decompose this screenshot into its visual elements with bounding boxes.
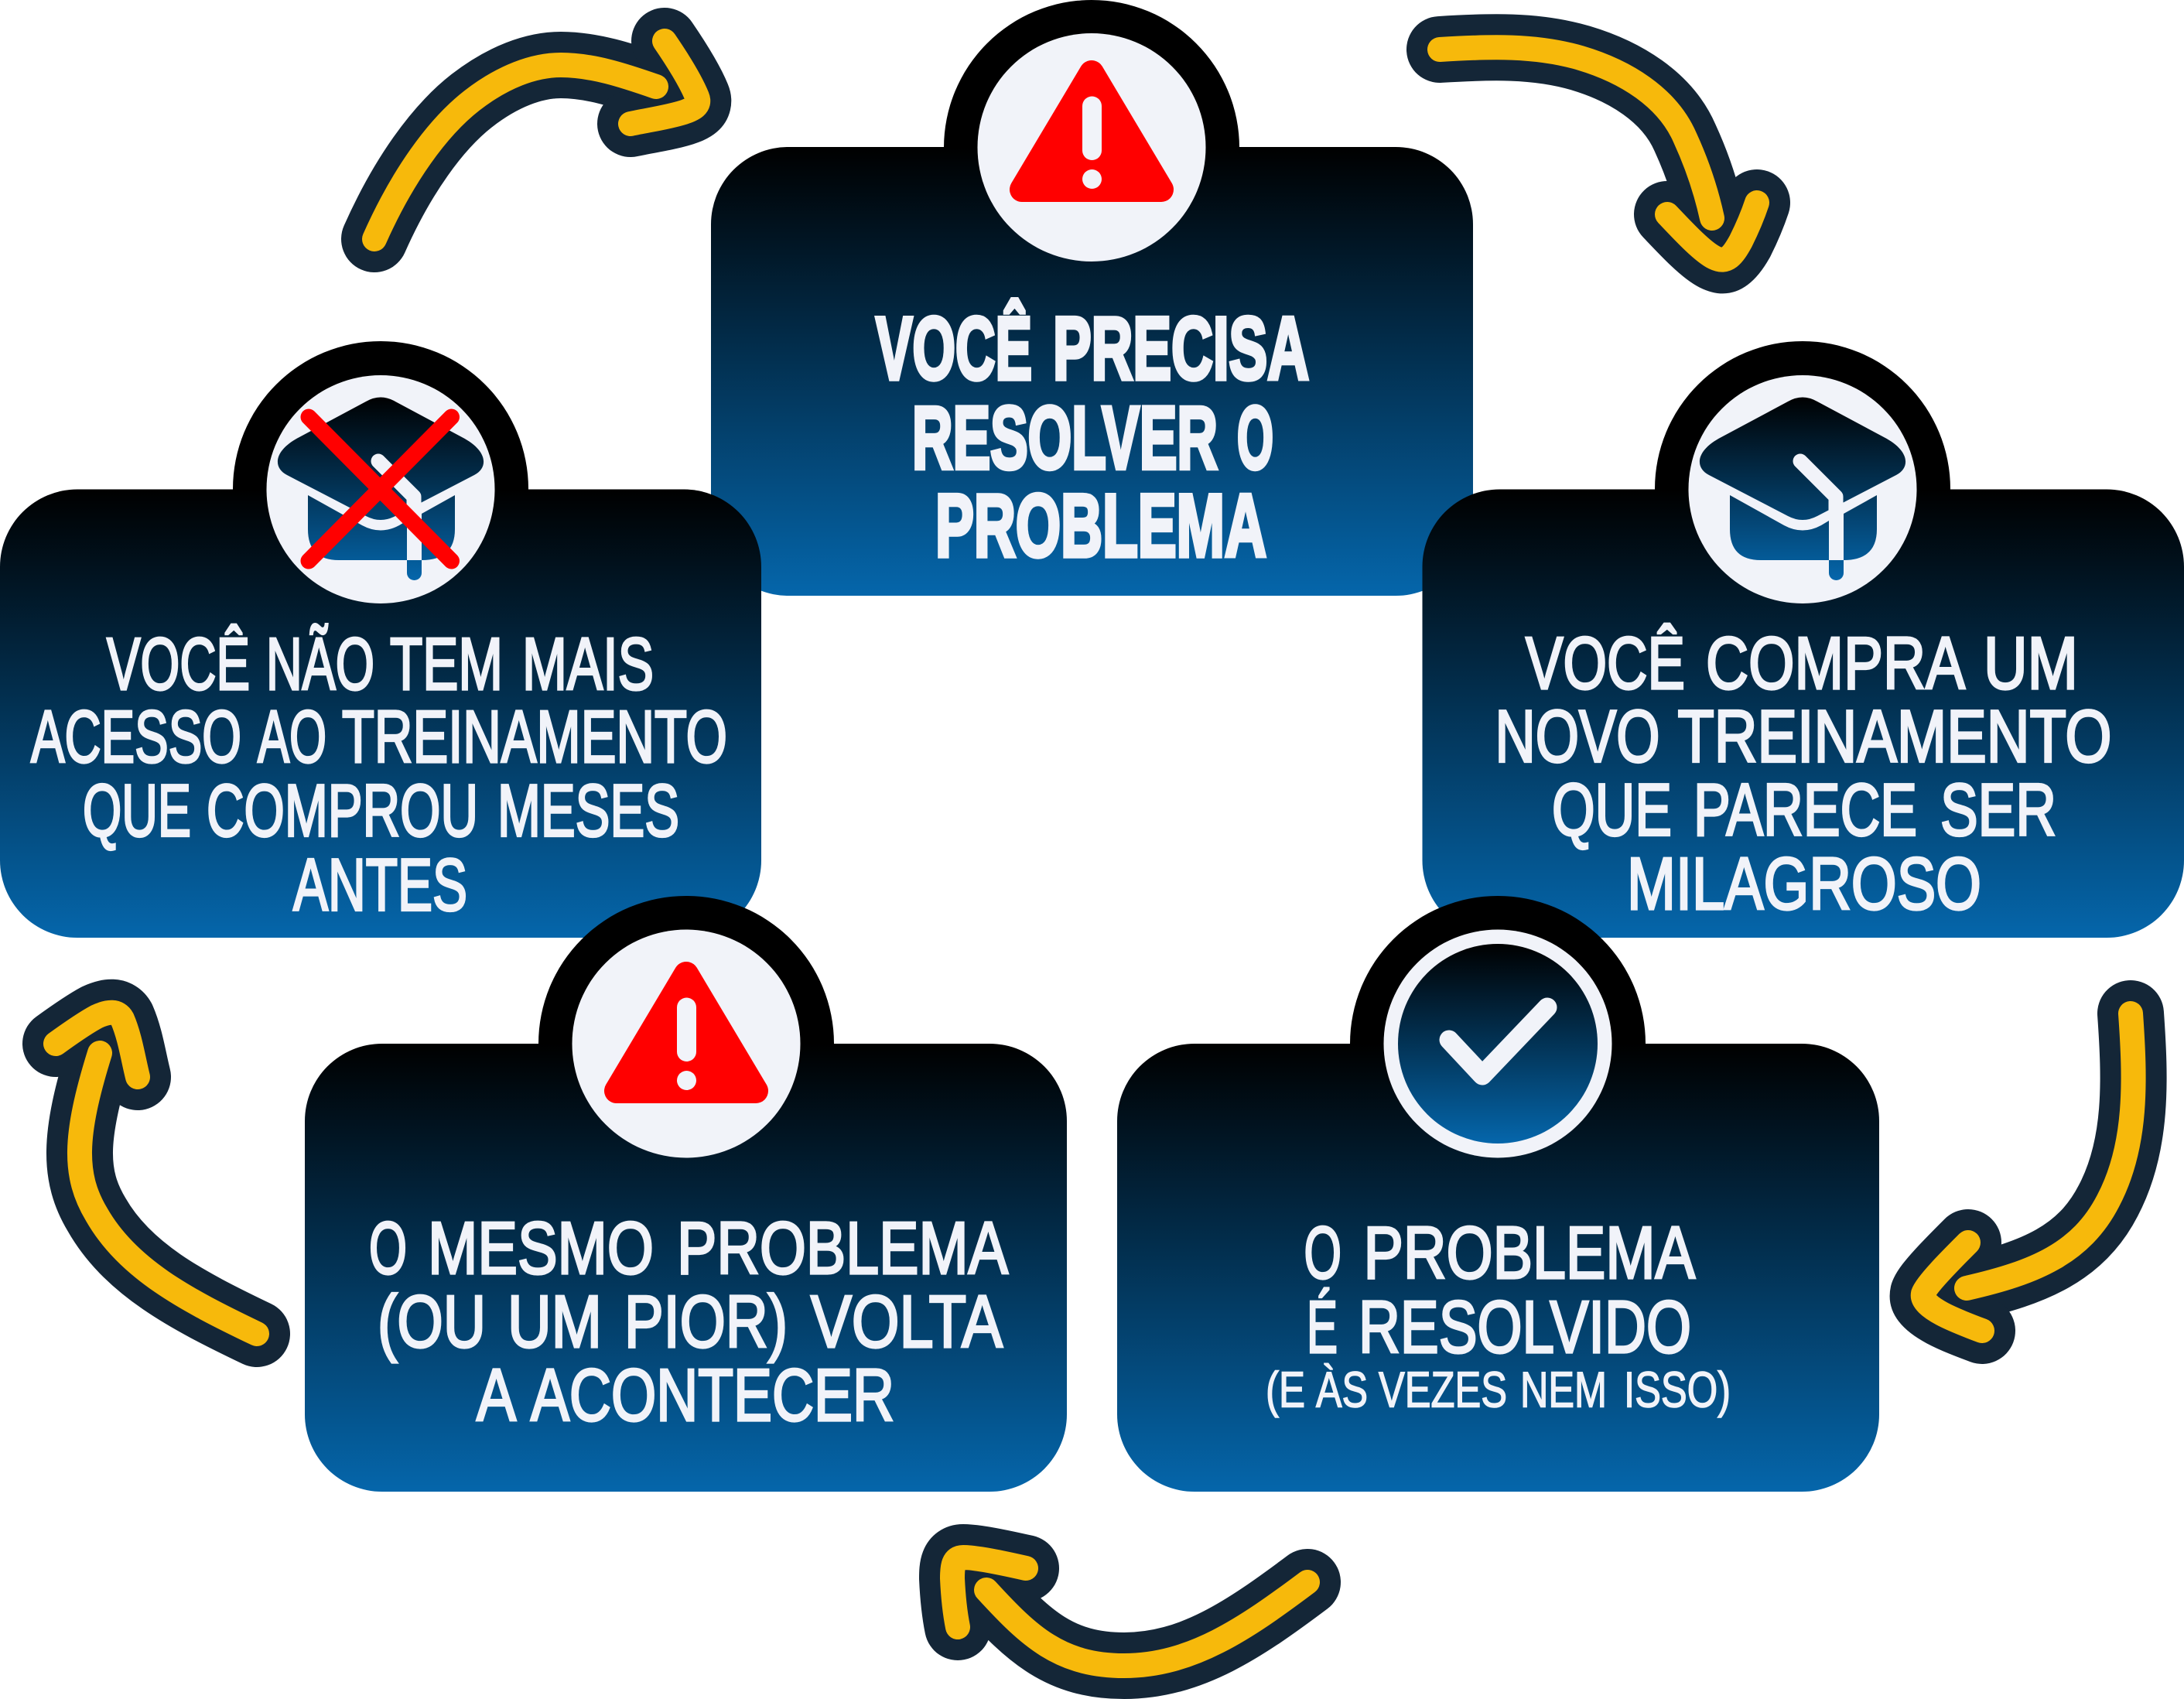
text: você não tem mais acesso ao treinamento: MAIS: [522, 623, 654, 706]
text: você não tem mais acesso ao treinamento: VOCÊ: [107, 623, 250, 706]
text: o problema é resolvido: RESOLVIDO: [1359, 1286, 1691, 1369]
text: o problema é resolvido: (E: [1266, 1362, 1305, 1417]
arrow: top right: [1440, 47, 1757, 260]
arrow: right: [1923, 1014, 2134, 1331]
arrow: left: [56, 1013, 257, 1334]
text: o problema é resolvido: VEZES: [1379, 1362, 1507, 1417]
text: o problema é resolvido: [1266, 1212, 1731, 1417]
panel: você precisa resolver o problema: [711, 0, 1473, 596]
text: você não tem mais acesso ao treinamento: COMPROU: [207, 769, 478, 853]
text: você compra um novo treinamento: PARECE: [1694, 769, 1917, 851]
text: o problema é resolvido: ISSO): [1624, 1362, 1731, 1417]
text: o mesmo problema volta a acontecer: PROBLEMA: [677, 1207, 1008, 1290]
text: o problema é resolvido: PROBLEMA: [1363, 1212, 1695, 1294]
text: o mesmo problema volta a acontecer: VOLTA: [811, 1280, 1003, 1363]
text: o mesmo problema volta a acontecer: A: [477, 1354, 516, 1437]
text: o mesmo problema volta a acontecer: PIOR): [624, 1280, 788, 1363]
panel: você não tem mais acesso: [0, 341, 761, 938]
text: você precisa resolver o problema: PROBLEMA: [935, 477, 1266, 576]
icon: check mark: [1449, 1007, 1547, 1075]
text: o mesmo problema volta a acontecer: [369, 1207, 1008, 1437]
text: você precisa resolver o problema: O: [1237, 389, 1273, 488]
text: você não tem mais acesso ao treinamento: MESES: [497, 769, 679, 853]
panel: o mesmo problema volta a acontecer: [305, 896, 1067, 1492]
text: você compra um novo treinamento: MILAGROSO: [1627, 843, 1981, 925]
text: você precisa resolver o problema: VOCÊ: [876, 299, 1032, 398]
arrow: bottom: [952, 1557, 1307, 1666]
text: você precisa resolver o problema: PRECISA: [1053, 299, 1309, 398]
text: você compra um novo treinamento: SER: [1940, 769, 2056, 851]
text: o problema é resolvido: ÀS: [1316, 1362, 1368, 1417]
icon: warning triangle: [617, 974, 756, 1091]
text: o mesmo problema volta a acontecer: O: [369, 1207, 407, 1290]
text: você compra um novo treinamento: QUE: [1552, 769, 1672, 851]
text: você compra um novo treinamento: COMPRA: [1706, 622, 1965, 705]
text: você compra um novo treinamento: [1495, 622, 2112, 925]
text: o mesmo problema volta a acontecer: MESMO: [428, 1207, 654, 1290]
text: você precisa resolver o problema: [876, 299, 1309, 576]
text: o mesmo problema volta a acontecer: (OU: [378, 1280, 486, 1363]
text: você não tem mais acesso ao treinamento: ANTES: [293, 843, 467, 927]
text: o problema é resolvido: É: [1307, 1286, 1338, 1369]
text: o problema é resolvido: O: [1304, 1212, 1342, 1294]
text: você não tem mais acesso ao treinamento: QUE: [83, 769, 191, 853]
arrow: top left: [374, 41, 698, 239]
text: você não tem mais acesso ao treinamento: TEM: [390, 623, 503, 706]
icon: warning triangle: [1022, 73, 1161, 190]
text: você não tem mais acesso ao treinamento: ACESSO: [31, 696, 241, 778]
text: o mesmo problema volta a acontecer: UM: [508, 1280, 602, 1363]
text: você não tem mais acesso ao treinamento: [31, 623, 727, 927]
text: você não tem mais acesso ao treinamento: AO: [258, 696, 326, 778]
icon: graduation cap: [1700, 398, 1905, 580]
text: você precisa resolver o problema: RESOLVER: [912, 389, 1218, 488]
text: você não tem mais acesso ao treinamento: NÃO: [266, 623, 374, 706]
text: o mesmo problema volta a acontecer: ACONTECER: [531, 1354, 894, 1437]
icon: graduation cap crossed out: [278, 398, 484, 580]
panel: o problema é resolvido: [1117, 896, 1879, 1492]
text: o problema é resolvido: NEM: [1520, 1362, 1607, 1417]
text: você compra um novo treinamento: UM: [1984, 622, 2078, 705]
text: você compra um novo treinamento: NOVO: [1495, 696, 1660, 778]
panel: você compra um novo treinamento: [1422, 341, 2184, 938]
text: você não tem mais acesso ao treinamento: TREINAMENTO: [342, 696, 727, 778]
text: você compra um novo treinamento: VOCÊ: [1526, 622, 1685, 705]
